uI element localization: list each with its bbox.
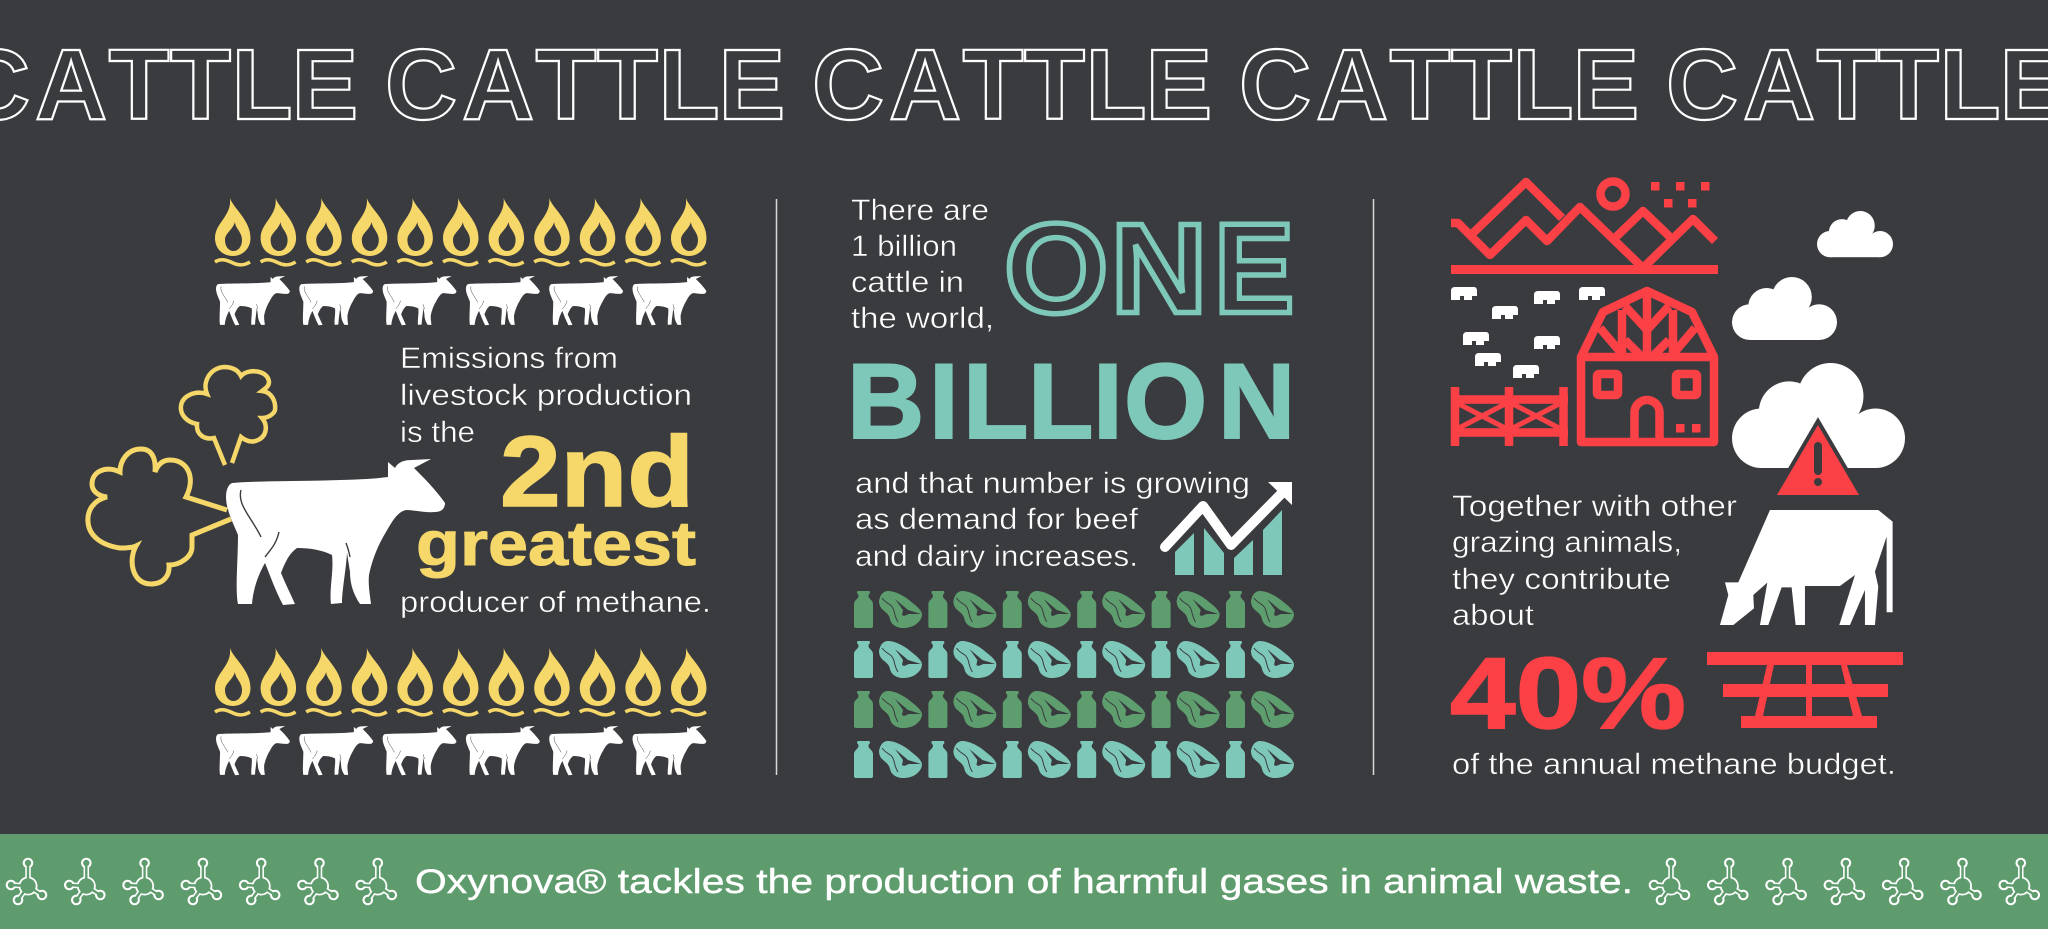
headline: greatest: greatest	[416, 510, 696, 579]
text: emissions intro: is the	[400, 416, 475, 449]
icon row: bottom cows	[216, 726, 706, 775]
title: repeated outlined CATTLE: CATTLE	[812, 29, 1212, 141]
icon grid: milk bottles and steaks	[854, 591, 1294, 778]
icon: small gas cloud	[181, 367, 275, 465]
icon row: bottom flames	[215, 648, 706, 715]
text: emissions intro: livestock production	[400, 379, 692, 412]
text: emissions intro	[400, 342, 692, 449]
text: together with other grazing animals: Together with other	[1452, 490, 1737, 523]
icon: grazing cow	[1720, 510, 1893, 625]
text: together with other grazing animals: grazing animals,	[1452, 526, 1682, 559]
icons: molecules left	[6, 858, 397, 905]
headline: ONE outlined: N	[1110, 196, 1208, 340]
text: there are 1 billion: the world,	[851, 302, 994, 335]
headline: ONE outlined	[1004, 196, 1294, 340]
text: emissions intro: Emissions from	[400, 342, 618, 375]
icons: molecules right	[1649, 858, 2040, 905]
footer band	[0, 834, 2048, 929]
headline: ONE outlined: O	[1004, 196, 1109, 340]
icon: herd of animals	[1451, 287, 1605, 378]
text: number is growing: as demand for beef	[855, 503, 1139, 536]
icon: barn	[1581, 291, 1714, 442]
footer text: Oxynova® tackles the production of harmful gases in animal waste.	[415, 863, 1633, 901]
icon: mountain landscape	[1451, 182, 1718, 274]
chart icon: rising bars and arrow	[1165, 482, 1292, 575]
text: there are 1 billion: cattle in	[851, 266, 964, 299]
headline: ONE outlined: E	[1214, 198, 1294, 340]
headline: 40%: 40%	[1450, 638, 1686, 750]
icon row: top cows	[216, 276, 706, 325]
icon: large cow	[226, 459, 445, 605]
text: together with other grazing animals: they contribute	[1452, 563, 1671, 596]
icon: warning triangle	[1777, 425, 1859, 495]
icon: large cloud	[1732, 363, 1905, 468]
text: annual methane budget: of the annual methane budget.	[1452, 748, 1896, 781]
text: number is growing	[855, 467, 1250, 573]
text: there are 1 billion	[851, 194, 994, 335]
icon row: top flames	[215, 198, 706, 265]
text: there are 1 billion: There are	[851, 194, 989, 227]
text: number is growing: and dairy increases.	[855, 540, 1138, 573]
icon: medium cloud	[1732, 277, 1837, 340]
panel: emissions from livestock	[88, 198, 711, 775]
title: repeated outlined CATTLE	[0, 29, 2048, 141]
text: together with other grazing animals	[1452, 490, 1737, 632]
text: number is growing: and that number is growing	[855, 467, 1250, 500]
title: repeated outlined CATTLE: CATTLE	[1239, 29, 1639, 141]
panel: one billion cattle	[847, 194, 1295, 778]
headline: BILLION: BILLION	[847, 341, 1295, 461]
text: together with other grazing animals: about	[1452, 599, 1534, 632]
headline: 2nd: 2nd	[500, 416, 694, 528]
icon: feeding trough table	[1707, 652, 1903, 728]
panel: grazing animals	[1450, 182, 1905, 781]
title: repeated outlined CATTLE: CATTLE	[385, 29, 785, 141]
icon: fence	[1451, 387, 1568, 446]
text: producer of methane: producer of methane.	[400, 586, 711, 619]
text: there are 1 billion: 1 billion	[851, 230, 957, 263]
icon: big gas cloud	[88, 449, 231, 584]
icon: small cloud	[1817, 211, 1893, 257]
